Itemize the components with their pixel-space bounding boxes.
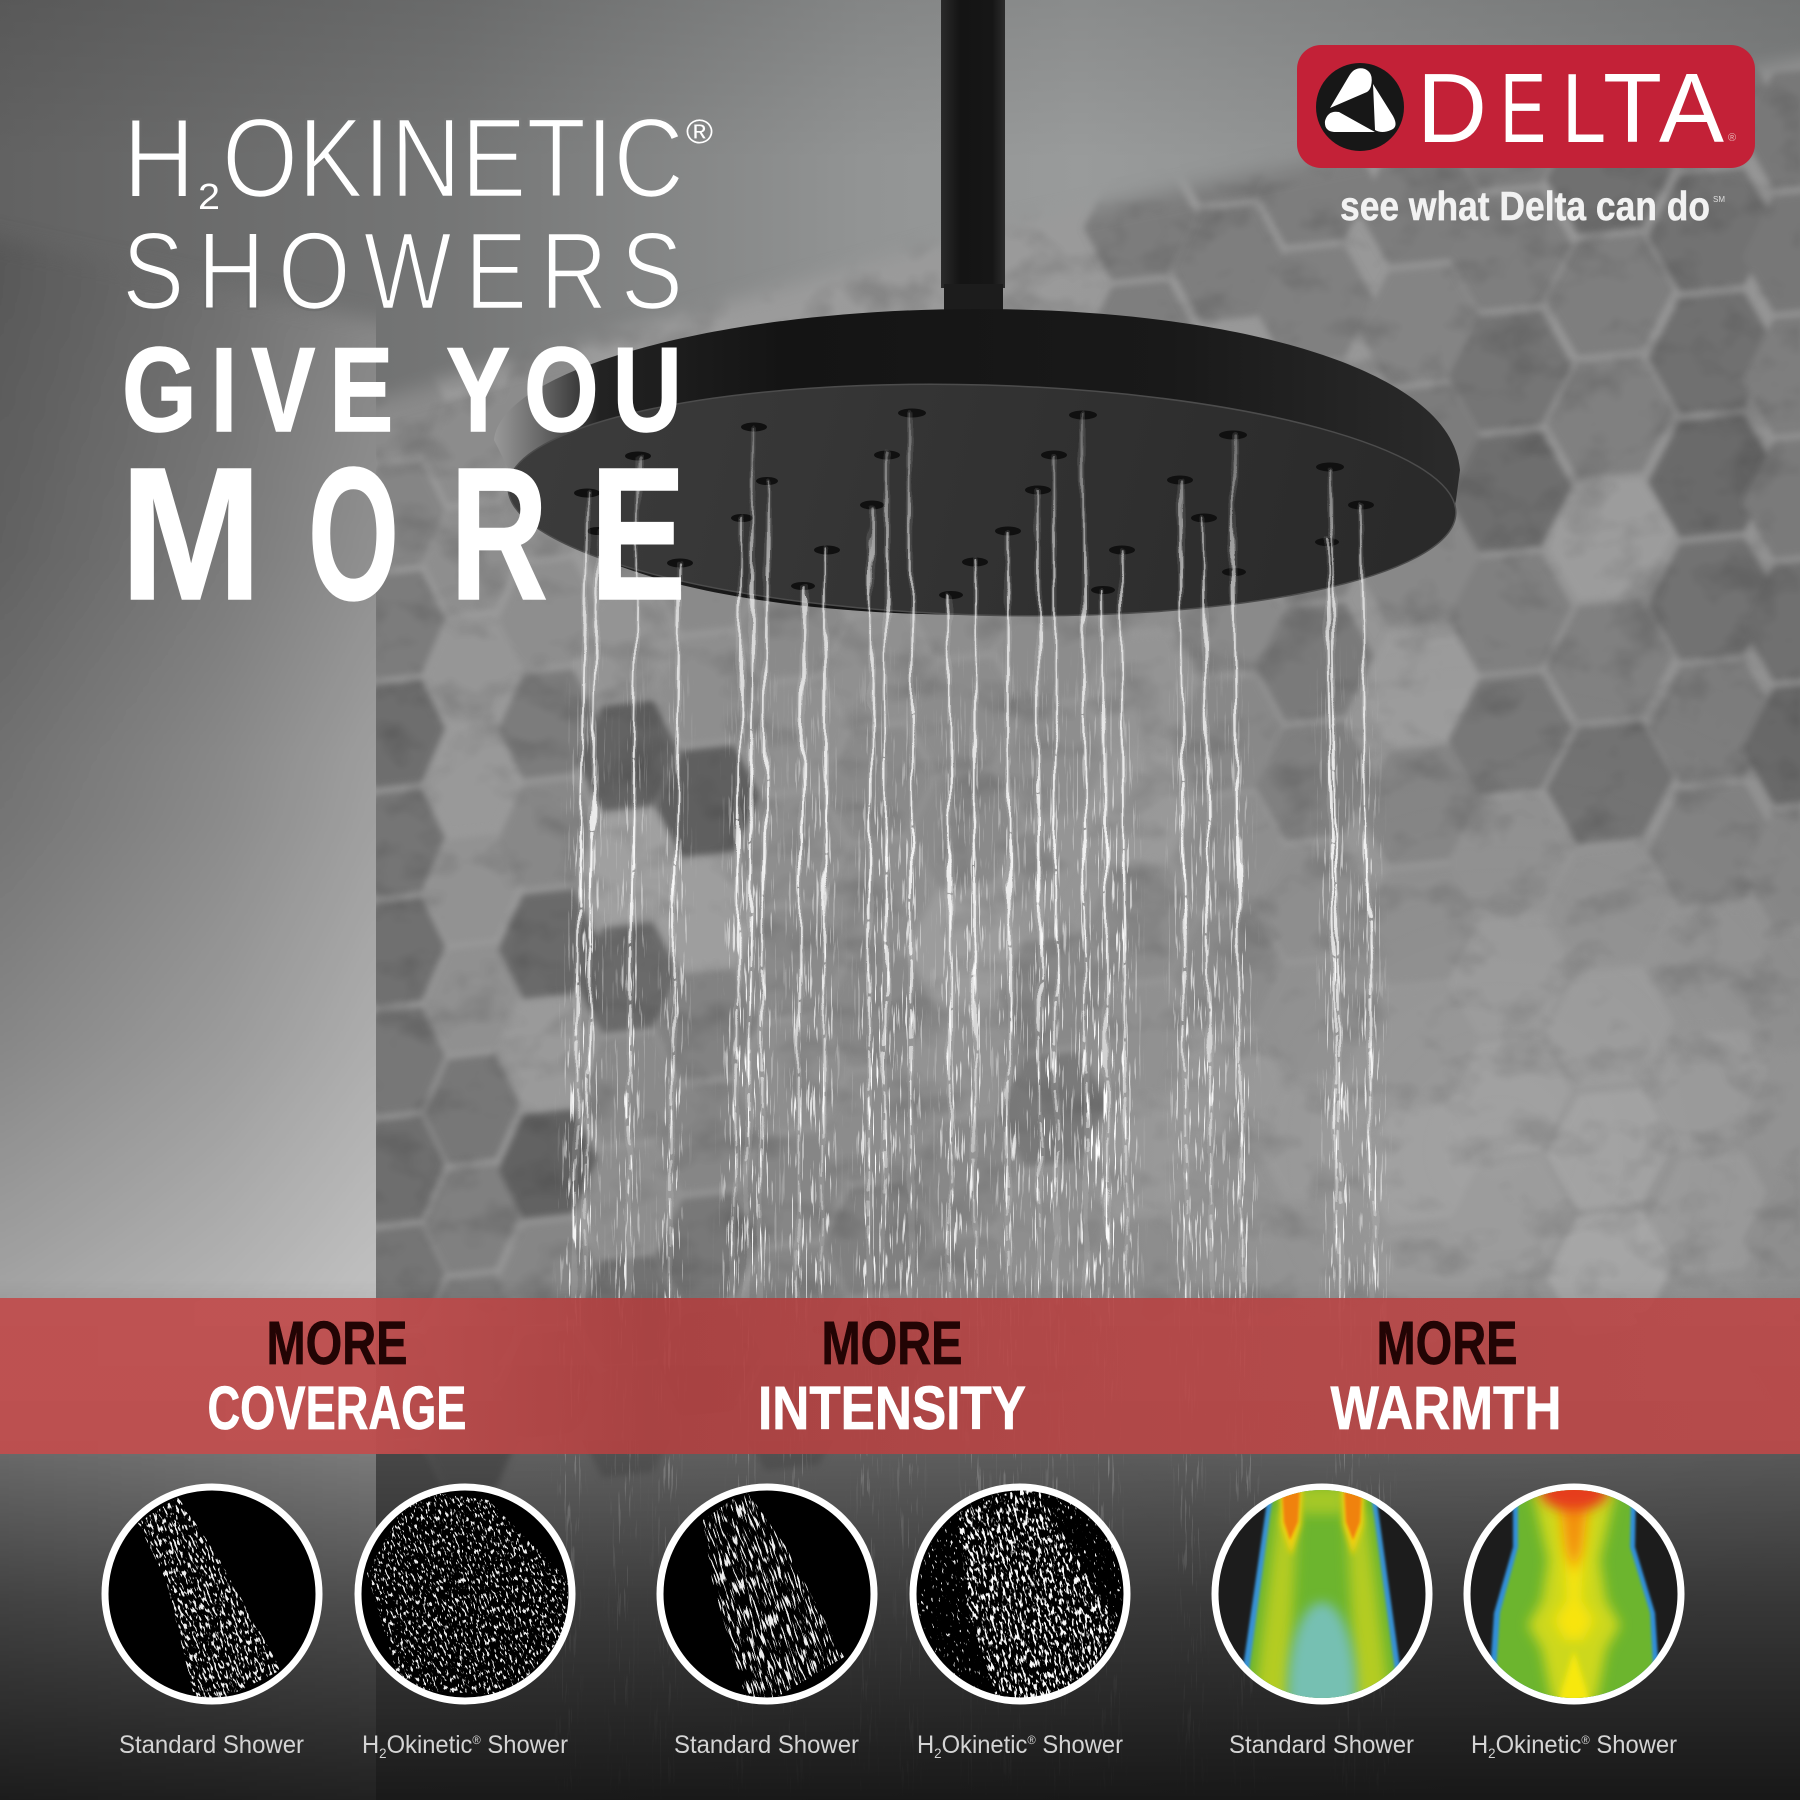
logo wordmark: L [1562,53,1606,163]
title line: showers: SHOWERS [122,210,683,333]
label: Shower [1590,1731,1677,1759]
label: Okinetic [1496,1731,1581,1759]
label: H [362,1731,380,1759]
red benefits band [0,1298,1800,1454]
bottom dark gradient [0,1280,1800,1800]
Delta logo [1297,45,1755,229]
label: 2 [379,1745,387,1761]
label: 2 [1488,1745,1496,1761]
logo wordmark: D [1417,53,1487,163]
label: ® [1581,1733,1590,1747]
spray photo: h2okinetic coverage [354,1484,576,1704]
label: H [1471,1731,1489,1759]
shower head [494,309,1460,628]
label: Okinetic [387,1731,472,1759]
heading: more warmth [1330,1309,1562,1442]
label: Shower [481,1731,568,1759]
logo red plate [1297,45,1755,168]
left plain wall [0,245,376,1800]
heading: more coverage: MORE [266,1309,408,1377]
title line: H2Okinetic: H [123,95,195,221]
logo wordmark: A [1659,53,1725,163]
spray photo: standard coverage [29,1408,401,1780]
heading: more coverage: COVERAGE [208,1374,466,1442]
title line: H2Okinetic: ® [686,113,713,151]
logo wordmark: E [1500,53,1546,163]
heading: more intensity: MORE [822,1309,962,1377]
label: ® [1027,1733,1036,1747]
label: ® [472,1733,481,1747]
comparison: coverage [29,1408,651,1781]
nozzles [574,408,1374,599]
title line: H2Okinetic: OKINETIC [222,95,684,221]
thermal image: standard warmth [1212,1484,1432,1704]
thermal image: h2okinetic warmth [1467,1474,1681,1702]
spray face [505,372,1459,628]
title line: more: E [590,429,686,640]
title line: more: M [120,429,262,640]
title [120,95,713,640]
falling water streams [556,410,1390,1705]
shower arm [941,0,1005,316]
title line: give you: GIVE YOU [122,324,682,458]
spray photo: h2okinetic intensity [910,1484,1130,1704]
label: 2 [934,1745,942,1761]
label: Standard Shower [674,1731,859,1759]
comparison: intensity [656,1484,1130,1758]
label: Okinetic [942,1731,1027,1759]
tagline: see what Delta can do [1340,183,1710,229]
heading: more warmth: MORE [1376,1309,1518,1377]
title line: more: O [308,429,399,640]
logo emblem [1316,63,1404,151]
title line: H2Okinetic: 2 [198,176,220,217]
rim [494,309,1460,615]
label: Shower [1036,1731,1123,1759]
service mark: SM [1713,195,1725,204]
comparison: warmth [1215,1474,1681,1778]
label: Standard Shower [1229,1731,1414,1759]
heading: more intensity [758,1309,1026,1442]
heading: more coverage [208,1309,466,1442]
logo wordmark: T [1603,53,1662,163]
registered mark: ® [1728,132,1736,144]
label: H [917,1731,935,1759]
title line: more: R [450,429,548,640]
spray photo: standard intensity [656,1484,878,1704]
label: Standard Shower [119,1731,304,1759]
heading: more intensity: INTENSITY [758,1374,1026,1442]
heading: more warmth: WARMTH [1330,1374,1562,1442]
